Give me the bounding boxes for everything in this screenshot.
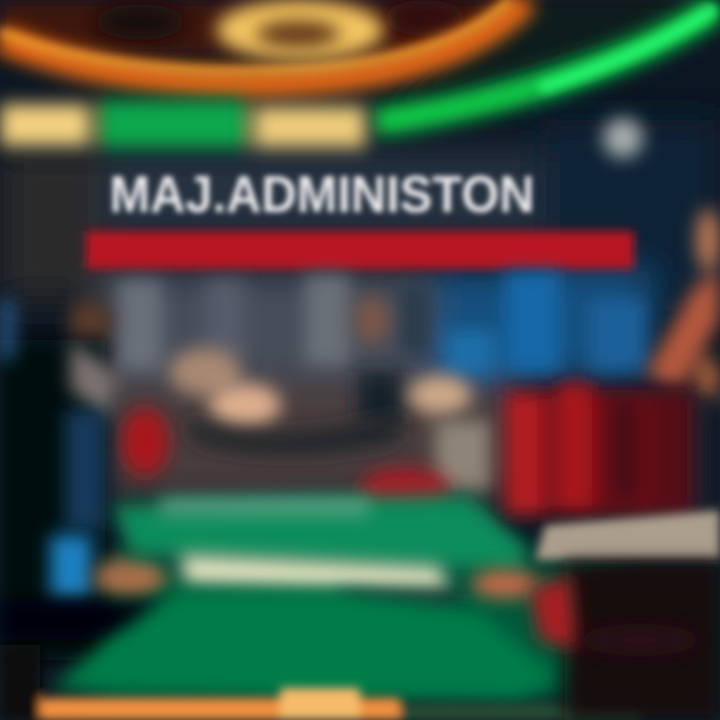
red banner [86,231,634,269]
title: MAJ.ADMINISTON [110,166,534,224]
white lamp [603,118,643,158]
red chip stacks [505,382,720,515]
green ceiling arc [375,8,716,122]
back wall stripes [118,272,645,375]
right foreground table [471,510,720,720]
right-side player arm [645,208,720,408]
bottom lights [0,645,640,720]
table and middle players [68,296,490,512]
yellow ceiling lamp [216,0,384,60]
left dark player [0,300,175,660]
casino ceiling [0,0,720,122]
light strip [0,100,366,148]
green felt table [50,495,560,700]
orange ceiling arc [0,0,526,83]
